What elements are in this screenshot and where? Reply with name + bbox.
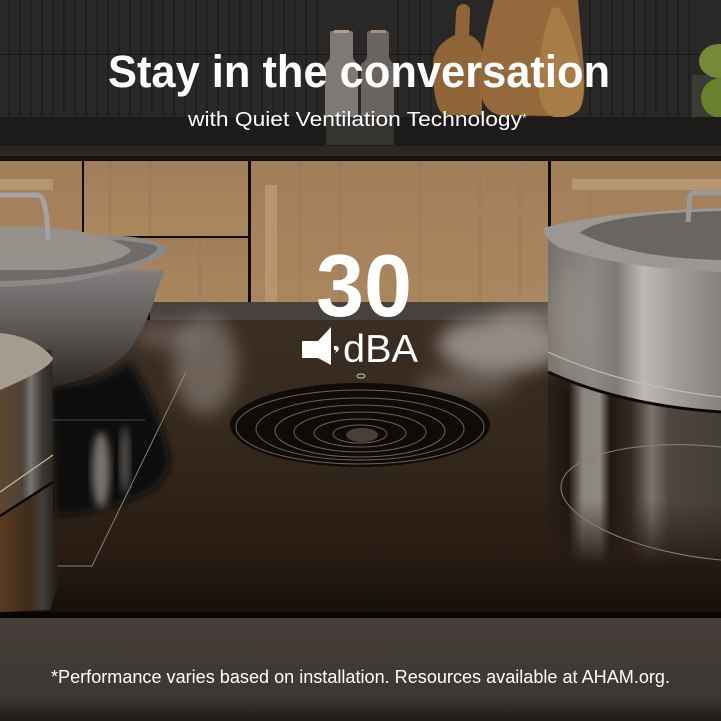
cooking zone outlines bbox=[0, 372, 721, 566]
countertop bbox=[0, 117, 721, 161]
footnote: *Performance varies based on installation. Resources available at AHAM.org. bbox=[51, 667, 670, 687]
wooden cutting boards bbox=[433, 0, 584, 117]
steam bbox=[131, 306, 562, 415]
left pot reflection bbox=[50, 362, 170, 515]
right pot reflection bbox=[548, 374, 721, 560]
cooktop back edge bbox=[150, 302, 550, 321]
left front pot bbox=[0, 333, 60, 612]
icon: speaker bbox=[302, 327, 339, 365]
downdraft vent bbox=[230, 383, 490, 467]
steam on pot bbox=[548, 265, 592, 375]
tile backsplash bbox=[0, 0, 721, 118]
subtitle: * bbox=[522, 111, 527, 125]
title: Stay in the conversation bbox=[108, 46, 610, 97]
apples and glass bbox=[692, 44, 721, 130]
figure: 30: 30 bbox=[316, 236, 412, 335]
counter front bbox=[0, 612, 721, 721]
induction cooktop surface bbox=[0, 320, 721, 614]
left mixing pot bbox=[0, 195, 167, 386]
salt and pepper mills bbox=[325, 30, 394, 118]
cooktop control icon bbox=[357, 374, 365, 378]
right stock pot bbox=[543, 193, 721, 412]
subtitle: with Quiet Ventilation Technology bbox=[187, 108, 523, 131]
unit: dBA: dBA bbox=[343, 328, 418, 371]
wood cabinets bbox=[0, 160, 721, 311]
